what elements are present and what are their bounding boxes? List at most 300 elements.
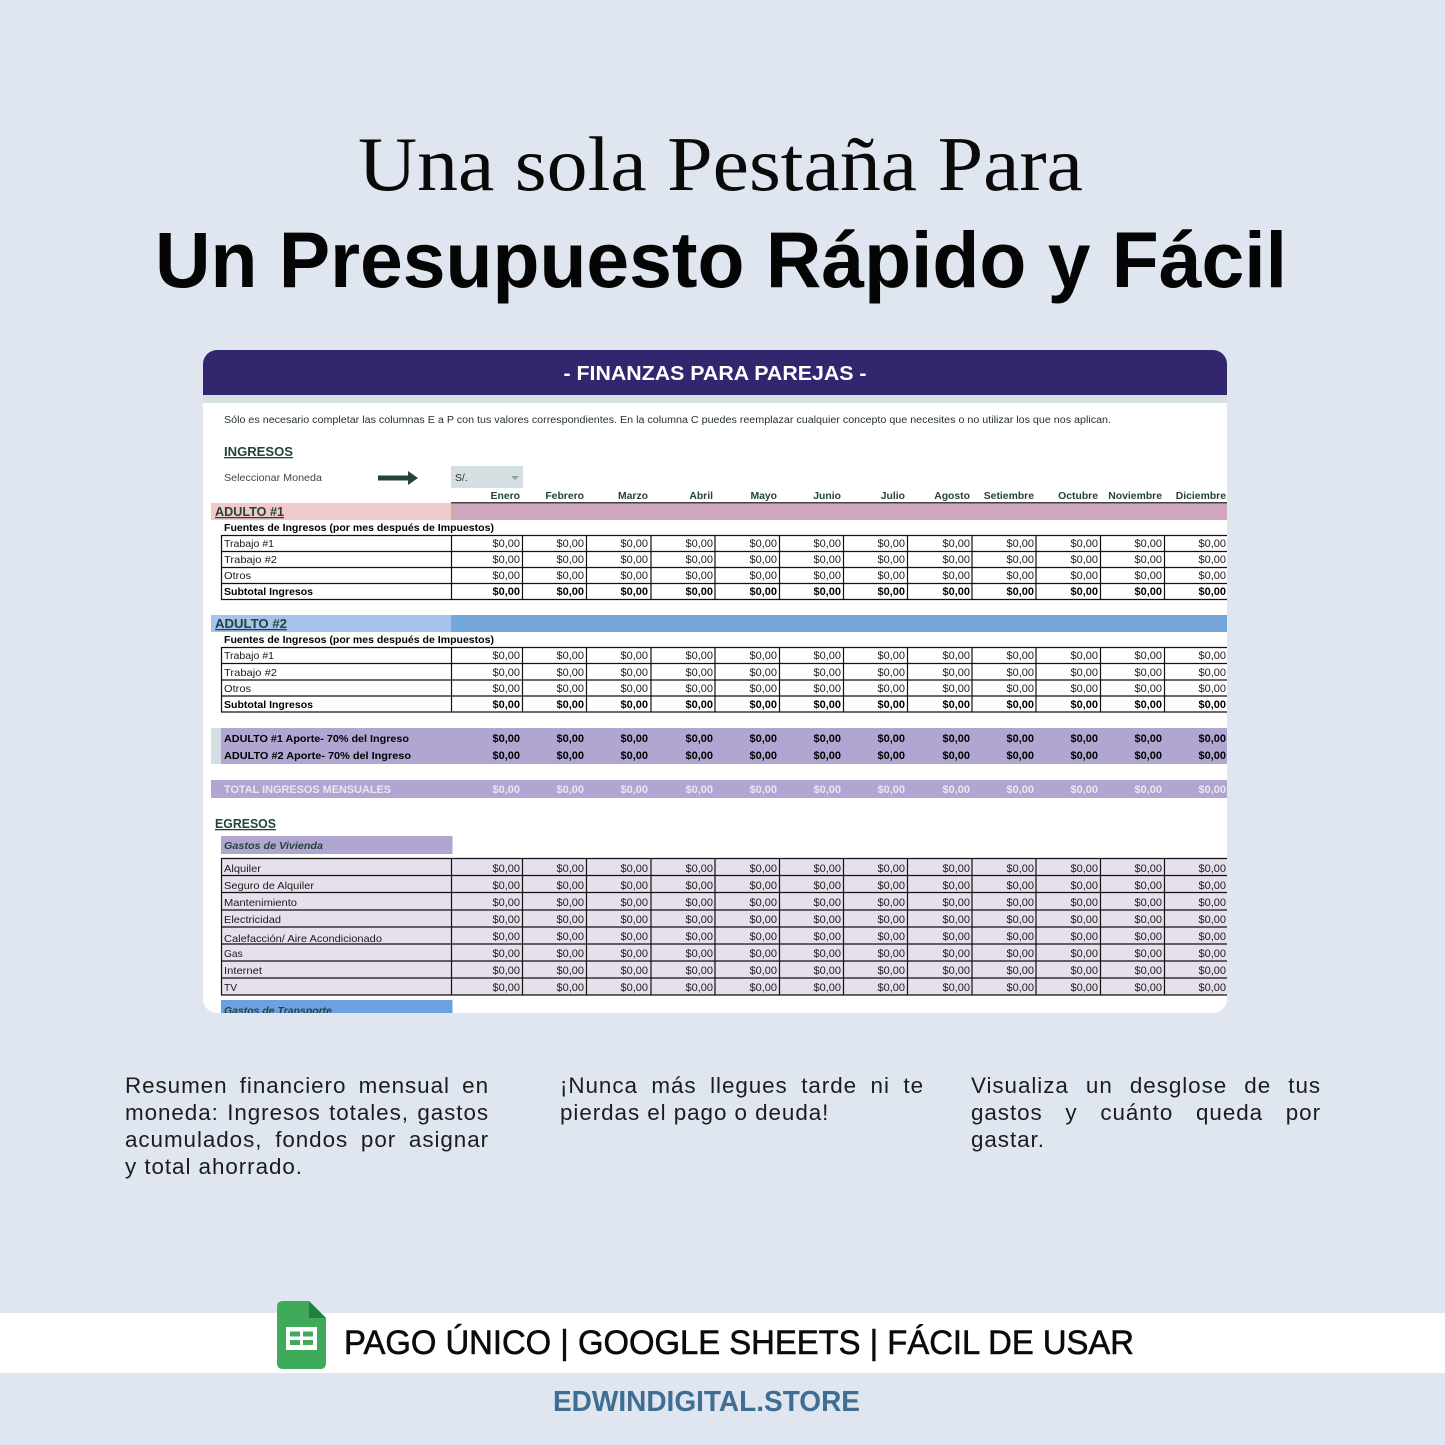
table: adulto 1 income: $0,00 — [1006, 570, 1034, 582]
table: adulto 2 income: $0,00 — [813, 667, 841, 679]
table: adulto 2 income: $0,00 — [749, 683, 777, 695]
section: adulto 1 band — [211, 502, 1227, 520]
table: adulto 2 income: $0,00 — [1006, 650, 1034, 662]
table: housing expenses: $0,00 — [1070, 982, 1098, 994]
table: housing expenses: $0,00 — [1006, 965, 1034, 977]
table: housing expenses: $0,00 — [492, 880, 520, 892]
table: adulto 2 income: $0,00 — [556, 650, 584, 662]
table: adulto 1 income: $0,00 — [1198, 570, 1226, 582]
table: adulto 2 income: $0,00 — [877, 650, 905, 662]
contribution rows: $0,00 — [1006, 750, 1034, 762]
contribution rows — [211, 728, 1227, 764]
table: housing expenses: $0,00 — [749, 965, 777, 977]
table: housing expenses: $0,00 — [556, 880, 584, 892]
table: adulto 1 income: $0,00 — [685, 586, 713, 598]
table: housing expenses: $0,00 — [556, 897, 584, 909]
table: adulto 2 income: $0,00 — [492, 699, 520, 711]
table: adulto 2 income: $0,00 — [942, 683, 970, 695]
table: adulto 1 income: Subtotal Ingresos — [224, 587, 313, 598]
table: adulto 1 income: $0,00 — [877, 586, 905, 598]
table: housing expenses: $0,00 — [877, 863, 905, 875]
table: housing expenses: Gas — [224, 949, 243, 960]
table: adulto 1 income: $0,00 — [556, 554, 584, 566]
table: adulto 2 income: $0,00 — [942, 650, 970, 662]
table: housing expenses: $0,00 — [685, 948, 713, 960]
table: adulto 1 income: $0,00 — [1134, 570, 1162, 582]
table: housing expenses: $0,00 — [942, 931, 970, 943]
currency selector: Seleccionar Moneda — [224, 473, 322, 484]
title line 2: Un Presupuesto Rápido y Fácil — [155, 215, 1287, 304]
table: housing expenses: $0,00 — [1006, 931, 1034, 943]
table: adulto 1 income: $0,00 — [749, 554, 777, 566]
month headers — [491, 492, 1226, 501]
subheading adulto 2: Fuentes de Ingresos (por mes después de Impuestos) — [224, 635, 494, 646]
contribution rows: $0,00 — [620, 750, 648, 762]
table: housing expenses: $0,00 — [877, 880, 905, 892]
month headers: Marzo — [618, 491, 648, 502]
table: housing expenses: $0,00 — [1198, 914, 1226, 926]
table: adulto 2 income: $0,00 — [620, 650, 648, 662]
table: housing expenses: $0,00 — [942, 948, 970, 960]
table: housing expenses: $0,00 — [1006, 948, 1034, 960]
table: adulto 1 income: $0,00 — [492, 570, 520, 582]
table: adulto 1 income: $0,00 — [556, 538, 584, 550]
table: adulto 2 income: $0,00 — [1006, 683, 1034, 695]
table: adulto 2 income: $0,00 — [492, 650, 520, 662]
table: housing expenses — [221, 858, 1227, 995]
table: adulto 1 income: $0,00 — [1070, 570, 1098, 582]
table: housing expenses: $0,00 — [1070, 931, 1098, 943]
month headers: Setiembre — [984, 491, 1034, 502]
month headers: Noviembre — [1108, 491, 1162, 502]
total monthly income — [211, 780, 1227, 798]
table: housing expenses: $0,00 — [1134, 880, 1162, 892]
table: housing expenses: $0,00 — [877, 914, 905, 926]
table: adulto 2 income: $0,00 — [1006, 667, 1034, 679]
table: housing expenses: $0,00 — [749, 897, 777, 909]
text block: column 2: pierdas el pago o deuda! — [560, 1100, 829, 1125]
table: housing expenses: $0,00 — [1134, 931, 1162, 943]
table: housing expenses: $0,00 — [813, 880, 841, 892]
table: housing expenses: $0,00 — [620, 931, 648, 943]
table: adulto 2 income: $0,00 — [877, 699, 905, 711]
table: housing expenses: $0,00 — [1006, 863, 1034, 875]
contribution rows: $0,00 — [1198, 733, 1226, 745]
total monthly income: $0,00 — [1198, 784, 1226, 796]
table: adulto 2 income: $0,00 — [492, 667, 520, 679]
table: housing expenses: $0,00 — [1006, 914, 1034, 926]
contribution rows: $0,00 — [556, 733, 584, 745]
table: housing expenses: $0,00 — [620, 863, 648, 875]
table: housing expenses: $0,00 — [877, 965, 905, 977]
table: adulto 2 income: $0,00 — [620, 667, 648, 679]
table: housing expenses: $0,00 — [492, 897, 520, 909]
table: housing expenses: $0,00 — [685, 982, 713, 994]
table: adulto 1 income: $0,00 — [1134, 586, 1162, 598]
table: adulto 1 income: $0,00 — [942, 538, 970, 550]
table: adulto 2 income: $0,00 — [1006, 699, 1034, 711]
table: housing expenses: $0,00 — [813, 914, 841, 926]
table: housing expenses: $0,00 — [877, 931, 905, 943]
table: adulto 1 income: $0,00 — [1006, 538, 1034, 550]
table: housing expenses: $0,00 — [1198, 897, 1226, 909]
total monthly income: $0,00 — [492, 784, 520, 796]
table: housing expenses: $0,00 — [749, 863, 777, 875]
total monthly income: $0,00 — [556, 784, 584, 796]
table: adulto 2 income: $0,00 — [556, 683, 584, 695]
text block: column 3: gastos y cuánto queda por — [971, 1100, 1321, 1125]
table: adulto 2 income: $0,00 — [942, 667, 970, 679]
text block: column 1: acumulados, fondos por asignar — [125, 1127, 489, 1152]
contribution rows: $0,00 — [556, 750, 584, 762]
table: adulto 1 income: $0,00 — [492, 554, 520, 566]
table: adulto 1 income: $0,00 — [813, 538, 841, 550]
table: adulto 1 income: $0,00 — [749, 538, 777, 550]
table: adulto 1 income: $0,00 — [813, 570, 841, 582]
category: gastos de vivienda — [221, 836, 452, 854]
table: housing expenses: $0,00 — [556, 982, 584, 994]
table: adulto 2 income: $0,00 — [749, 650, 777, 662]
table: housing expenses: $0,00 — [942, 982, 970, 994]
table: adulto 2 income: $0,00 — [1198, 667, 1226, 679]
table: adulto 1 income: $0,00 — [1006, 554, 1034, 566]
subheading adulto 1: Fuentes de Ingresos (por mes después de Impuestos) — [224, 523, 494, 534]
month headers: Octubre — [1058, 491, 1098, 502]
table: housing expenses: $0,00 — [492, 931, 520, 943]
table: housing expenses: $0,00 — [1070, 948, 1098, 960]
text block: column 3: gastar. — [971, 1127, 1045, 1152]
contribution rows: $0,00 — [942, 733, 970, 745]
table: housing expenses: $0,00 — [749, 948, 777, 960]
table: adulto 1 income: $0,00 — [620, 538, 648, 550]
table: housing expenses: $0,00 — [749, 982, 777, 994]
month headers: Diciembre — [1176, 491, 1226, 502]
table: housing expenses: $0,00 — [620, 948, 648, 960]
table: adulto 2 income: $0,00 — [1070, 650, 1098, 662]
text block: column 3 — [971, 1073, 1321, 1152]
table: housing expenses: $0,00 — [813, 863, 841, 875]
table: housing expenses: $0,00 — [1198, 982, 1226, 994]
table: housing expenses: $0,00 — [1198, 931, 1226, 943]
table: adulto 2 income: $0,00 — [620, 683, 648, 695]
contribution rows: $0,00 — [1006, 733, 1034, 745]
table: adulto 1 income: $0,00 — [685, 570, 713, 582]
table: adulto 2 income: $0,00 — [556, 667, 584, 679]
table: housing expenses: $0,00 — [877, 982, 905, 994]
table: housing expenses: $0,00 — [620, 880, 648, 892]
table: housing expenses: $0,00 — [749, 880, 777, 892]
table: housing expenses: Internet — [224, 966, 262, 977]
table: housing expenses: $0,00 — [685, 914, 713, 926]
table: housing expenses: Seguro de Alquiler — [224, 881, 315, 892]
total monthly income: $0,00 — [620, 784, 648, 796]
table: adulto 2 income: $0,00 — [1198, 650, 1226, 662]
table: adulto 2 income: $0,00 — [1134, 683, 1162, 695]
table: housing expenses: $0,00 — [813, 965, 841, 977]
text block: column 1 — [125, 1073, 489, 1179]
contribution rows: $0,00 — [813, 750, 841, 762]
table: adulto 2 income: $0,00 — [942, 699, 970, 711]
total monthly income: $0,00 — [685, 784, 713, 796]
table: housing expenses: $0,00 — [749, 914, 777, 926]
contribution rows: $0,00 — [685, 733, 713, 745]
table: housing expenses: $0,00 — [942, 897, 970, 909]
table: adulto 2 income: Subtotal Ingresos — [224, 700, 313, 711]
table: housing expenses: $0,00 — [813, 931, 841, 943]
contribution rows: $0,00 — [813, 733, 841, 745]
table: housing expenses: $0,00 — [1134, 982, 1162, 994]
contribution rows: $0,00 — [492, 750, 520, 762]
table: adulto 2 income: $0,00 — [1070, 683, 1098, 695]
text block: column 2: ¡Nunca más llegues tarde ni te — [560, 1073, 924, 1098]
table: housing expenses: $0,00 — [942, 914, 970, 926]
category: gastos de transporte — [221, 1000, 452, 1013]
table: adulto 1 income: $0,00 — [813, 586, 841, 598]
section: adulto 2 band — [211, 615, 1227, 632]
table: adulto 1 income: $0,00 — [685, 554, 713, 566]
table: adulto 2 income: Trabajo #2 — [224, 668, 277, 679]
table: adulto 2 income: $0,00 — [1198, 683, 1226, 695]
icon: google sheets — [277, 1301, 326, 1369]
table: housing expenses: $0,00 — [1134, 965, 1162, 977]
table: adulto 2 income: Trabajo #1 — [224, 651, 274, 662]
total monthly income: $0,00 — [942, 784, 970, 796]
header bar: - FINANZAS PARA PAREJAS - — [564, 363, 866, 385]
month headers: Julio — [881, 491, 905, 502]
table: adulto 1 income: $0,00 — [942, 554, 970, 566]
currency selector: S/. — [455, 473, 468, 484]
contribution rows: ADULTO #1 Aporte- 70% del Ingreso — [224, 734, 409, 745]
table: adulto 1 income: $0,00 — [620, 586, 648, 598]
total monthly income: $0,00 — [1070, 784, 1098, 796]
store url: EDWINDIGITAL.STORE — [553, 1386, 860, 1418]
table: adulto 2 income: $0,00 — [685, 667, 713, 679]
text block: column 3: Visualiza un desglose de tus — [971, 1073, 1321, 1098]
header bar — [203, 350, 1227, 403]
table: housing expenses: $0,00 — [492, 863, 520, 875]
table: housing expenses: $0,00 — [1070, 863, 1098, 875]
table: adulto 2 income — [221, 647, 1227, 712]
table: adulto 1 income: $0,00 — [1198, 586, 1226, 598]
table: housing expenses: $0,00 — [620, 965, 648, 977]
table: adulto 1 income: $0,00 — [1070, 538, 1098, 550]
contribution rows: $0,00 — [877, 733, 905, 745]
month headers: Mayo — [750, 491, 777, 502]
table: housing expenses: Mantenimiento — [224, 898, 297, 909]
table: adulto 2 income: $0,00 — [685, 683, 713, 695]
footer band — [0, 1313, 1445, 1373]
table: housing expenses: $0,00 — [620, 914, 648, 926]
month headers: Agosto — [934, 491, 970, 502]
table: housing expenses: $0,00 — [1006, 982, 1034, 994]
table: housing expenses: $0,00 — [1070, 965, 1098, 977]
table: adulto 1 income: $0,00 — [813, 554, 841, 566]
table: adulto 2 income: $0,00 — [877, 667, 905, 679]
table: adulto 2 income: $0,00 — [1134, 699, 1162, 711]
table: adulto 2 income: $0,00 — [492, 683, 520, 695]
table: housing expenses: $0,00 — [556, 863, 584, 875]
total monthly income: TOTAL INGRESOS MENSUALES — [224, 784, 391, 796]
contribution rows: $0,00 — [877, 750, 905, 762]
table: adulto 2 income: $0,00 — [813, 650, 841, 662]
table: housing expenses: $0,00 — [1198, 880, 1226, 892]
footer tagline: PAGO ÚNICO | GOOGLE SHEETS | FÁCIL DE USAR — [344, 1324, 1134, 1362]
table: housing expenses: $0,00 — [1070, 897, 1098, 909]
table: adulto 2 income: $0,00 — [1070, 667, 1098, 679]
instructions: Sólo es necesario completar las columnas E a P con tus valores correspondientes. En la columna C puedes reemplazar cualquier concepto que necesites o no utilizar los que nos aplican. — [224, 415, 1111, 426]
table: adulto 1 income: $0,00 — [942, 570, 970, 582]
category: gastos de vivienda: Gastos de Vivienda — [224, 841, 323, 852]
table: adulto 1 income: $0,00 — [1070, 554, 1098, 566]
table: adulto 1 income: $0,00 — [877, 554, 905, 566]
table: adulto 1 income: $0,00 — [685, 538, 713, 550]
table: housing expenses: $0,00 — [813, 948, 841, 960]
contribution rows: $0,00 — [1134, 750, 1162, 762]
table: housing expenses: $0,00 — [1006, 897, 1034, 909]
table: adulto 2 income: $0,00 — [1198, 699, 1226, 711]
table: adulto 1 income: Trabajo #2 — [224, 555, 277, 566]
table: adulto 2 income: $0,00 — [685, 699, 713, 711]
table: housing expenses: Electricidad — [224, 915, 281, 926]
table: housing expenses: $0,00 — [1070, 914, 1098, 926]
table: housing expenses: $0,00 — [813, 897, 841, 909]
month headers: Febrero — [545, 491, 584, 502]
table: housing expenses: $0,00 — [492, 965, 520, 977]
total monthly income: $0,00 — [877, 784, 905, 796]
contribution rows: $0,00 — [620, 733, 648, 745]
table: adulto 1 income: $0,00 — [749, 586, 777, 598]
table: housing expenses: $0,00 — [942, 965, 970, 977]
contribution rows: $0,00 — [685, 750, 713, 762]
table: adulto 2 income: Otros — [224, 684, 251, 695]
table: housing expenses: $0,00 — [1134, 863, 1162, 875]
table: adulto 2 income: $0,00 — [749, 667, 777, 679]
contribution rows: $0,00 — [1070, 733, 1098, 745]
table: housing expenses: $0,00 — [620, 982, 648, 994]
table: housing expenses: $0,00 — [1070, 880, 1098, 892]
table: housing expenses: $0,00 — [1134, 948, 1162, 960]
table: adulto 2 income: $0,00 — [813, 699, 841, 711]
section: adulto 2 band: ADULTO #2 — [215, 617, 287, 631]
contribution rows: $0,00 — [492, 733, 520, 745]
table: adulto 1 income: $0,00 — [877, 538, 905, 550]
table: housing expenses: $0,00 — [556, 948, 584, 960]
text block: column 2 — [560, 1073, 924, 1125]
table: housing expenses: $0,00 — [1134, 914, 1162, 926]
table: housing expenses: $0,00 — [685, 880, 713, 892]
contribution rows: $0,00 — [942, 750, 970, 762]
table: housing expenses: $0,00 — [492, 948, 520, 960]
section: adulto 1 band: ADULTO #1 — [215, 505, 284, 519]
table: housing expenses: $0,00 — [492, 982, 520, 994]
table: adulto 1 income: $0,00 — [556, 570, 584, 582]
total monthly income: $0,00 — [813, 784, 841, 796]
total monthly income: $0,00 — [1006, 784, 1034, 796]
table: adulto 1 income: $0,00 — [492, 538, 520, 550]
contribution rows: $0,00 — [1070, 750, 1098, 762]
contribution rows: $0,00 — [1134, 733, 1162, 745]
heading: ingresos: INGRESOS — [224, 444, 293, 459]
category: gastos de transporte: Gastos de Transporte — [224, 1006, 332, 1017]
table: housing expenses: $0,00 — [1198, 863, 1226, 875]
table: adulto 1 income: $0,00 — [620, 554, 648, 566]
table: adulto 1 income: $0,00 — [1198, 538, 1226, 550]
table: housing expenses: $0,00 — [942, 880, 970, 892]
table: adulto 1 income: $0,00 — [620, 570, 648, 582]
contribution rows: $0,00 — [1198, 750, 1226, 762]
table: housing expenses: $0,00 — [685, 897, 713, 909]
panel: spreadsheet — [203, 350, 1227, 1017]
table: housing expenses: $0,00 — [877, 897, 905, 909]
table: adulto 2 income: $0,00 — [1070, 699, 1098, 711]
table: adulto 1 income: $0,00 — [1070, 586, 1098, 598]
table: housing expenses: $0,00 — [556, 914, 584, 926]
table: adulto 1 income: Otros — [224, 571, 251, 582]
table: housing expenses: $0,00 — [620, 897, 648, 909]
table: adulto 1 income: $0,00 — [749, 570, 777, 582]
table: adulto 2 income: $0,00 — [620, 699, 648, 711]
table: housing expenses: $0,00 — [685, 965, 713, 977]
text block: column 1: Resumen financiero mensual en — [125, 1073, 489, 1098]
table: adulto 1 income: $0,00 — [1134, 538, 1162, 550]
title line 1: Una sola Pestaña Para — [358, 121, 1083, 207]
table: adulto 1 income: $0,00 — [942, 586, 970, 598]
contribution rows: $0,00 — [749, 733, 777, 745]
table: housing expenses: $0,00 — [1006, 880, 1034, 892]
table: housing expenses: $0,00 — [813, 982, 841, 994]
table: adulto 1 income: Trabajo #1 — [224, 539, 274, 550]
table: adulto 2 income: $0,00 — [877, 683, 905, 695]
table: housing expenses: $0,00 — [877, 948, 905, 960]
month headers: Junio — [813, 491, 841, 502]
table: housing expenses: $0,00 — [1134, 897, 1162, 909]
heading: egresos: EGRESOS — [215, 816, 276, 831]
text block: column 1: moneda: Ingresos totales, gastos — [125, 1100, 489, 1125]
currency selector — [224, 466, 523, 488]
table: housing expenses: TV — [224, 983, 237, 994]
table: housing expenses: $0,00 — [1198, 948, 1226, 960]
table: housing expenses: $0,00 — [556, 931, 584, 943]
table: adulto 1 income: $0,00 — [492, 586, 520, 598]
table: adulto 1 income — [221, 535, 1227, 600]
table: adulto 2 income: $0,00 — [749, 699, 777, 711]
month headers: Enero — [491, 491, 520, 502]
table: housing expenses: $0,00 — [942, 863, 970, 875]
table: housing expenses: $0,00 — [1198, 965, 1226, 977]
contribution rows: ADULTO #2 Aporte- 70% del Ingreso — [224, 751, 411, 762]
table: housing expenses: Alquiler — [224, 864, 262, 875]
table: housing expenses: $0,00 — [556, 965, 584, 977]
month headers: Abril — [689, 491, 713, 502]
total monthly income: $0,00 — [749, 784, 777, 796]
table: adulto 2 income: $0,00 — [556, 699, 584, 711]
table: housing expenses: $0,00 — [749, 931, 777, 943]
table: housing expenses: $0,00 — [685, 931, 713, 943]
table: adulto 1 income: $0,00 — [1134, 554, 1162, 566]
table: adulto 1 income: $0,00 — [877, 570, 905, 582]
text block: column 1: y total ahorrado. — [125, 1154, 303, 1179]
total monthly income: $0,00 — [1134, 784, 1162, 796]
table: adulto 1 income: $0,00 — [556, 586, 584, 598]
table: adulto 2 income: $0,00 — [1134, 667, 1162, 679]
table: adulto 1 income: $0,00 — [1198, 554, 1226, 566]
table: adulto 2 income: $0,00 — [685, 650, 713, 662]
table: adulto 2 income: $0,00 — [1134, 650, 1162, 662]
table: adulto 2 income: $0,00 — [813, 683, 841, 695]
table: housing expenses: $0,00 — [685, 863, 713, 875]
table: adulto 1 income: $0,00 — [1006, 586, 1034, 598]
table: housing expenses: $0,00 — [492, 914, 520, 926]
